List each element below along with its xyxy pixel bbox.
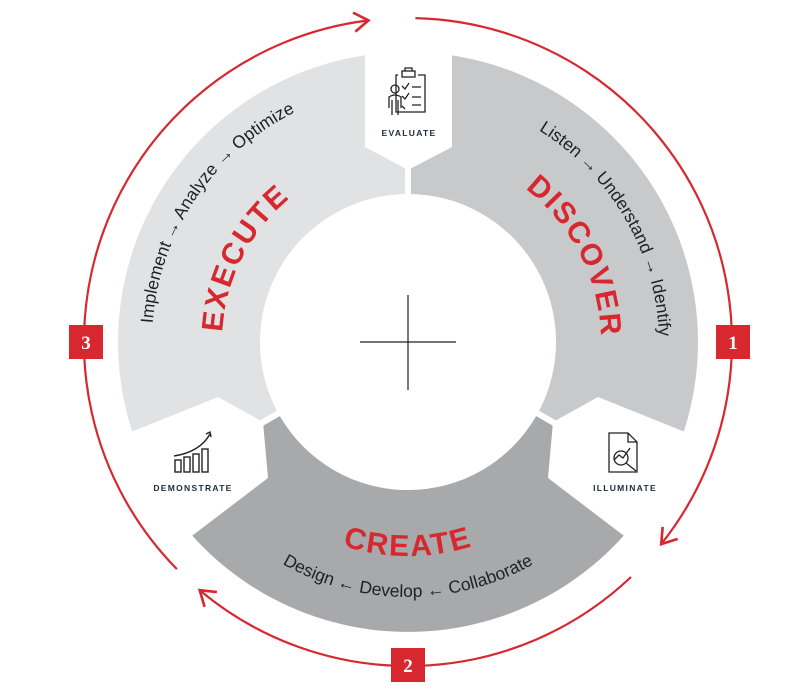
text: discover steps: Listen → Understand → Identify [540, 121, 672, 336]
label: illuminate: ILLUMINATE [593, 483, 657, 493]
badge: 1 [716, 325, 750, 359]
text: create steps: Design ← Develop ← Collaborate [284, 554, 532, 601]
arrow: cycle right [415, 18, 732, 544]
segment: discover [408, 52, 698, 487]
shield: demonstrate [96, 397, 268, 545]
badge: 2: 2 [403, 656, 413, 677]
icon: evaluate clipboard [389, 68, 425, 115]
shield: illuminate [548, 397, 720, 545]
badge: 3 [69, 325, 103, 359]
shield: evaluate [365, 30, 452, 170]
segment: create [157, 416, 659, 632]
center cross [360, 295, 456, 390]
text: execute steps: Implement → Analyze → Optimize [140, 105, 294, 322]
label: demonstrate: DEMONSTRATE [153, 483, 233, 493]
icon: illuminate document magnifier [609, 433, 637, 472]
badge: 2 [391, 648, 425, 682]
badge: 1: 1 [728, 333, 738, 354]
arrow: cycle left [84, 20, 368, 569]
heading: discover: DISCOVER [526, 174, 621, 335]
center circle [261, 195, 555, 489]
heading: create: CREATE [346, 527, 470, 556]
icon: demonstrate chart [174, 432, 211, 472]
badge: 3: 3 [81, 333, 91, 354]
arrow: cycle bottom [200, 577, 631, 666]
label: evaluate: EVALUATE [382, 128, 436, 138]
heading: execute: EXECUTE [202, 184, 288, 330]
segment: execute [118, 52, 408, 487]
